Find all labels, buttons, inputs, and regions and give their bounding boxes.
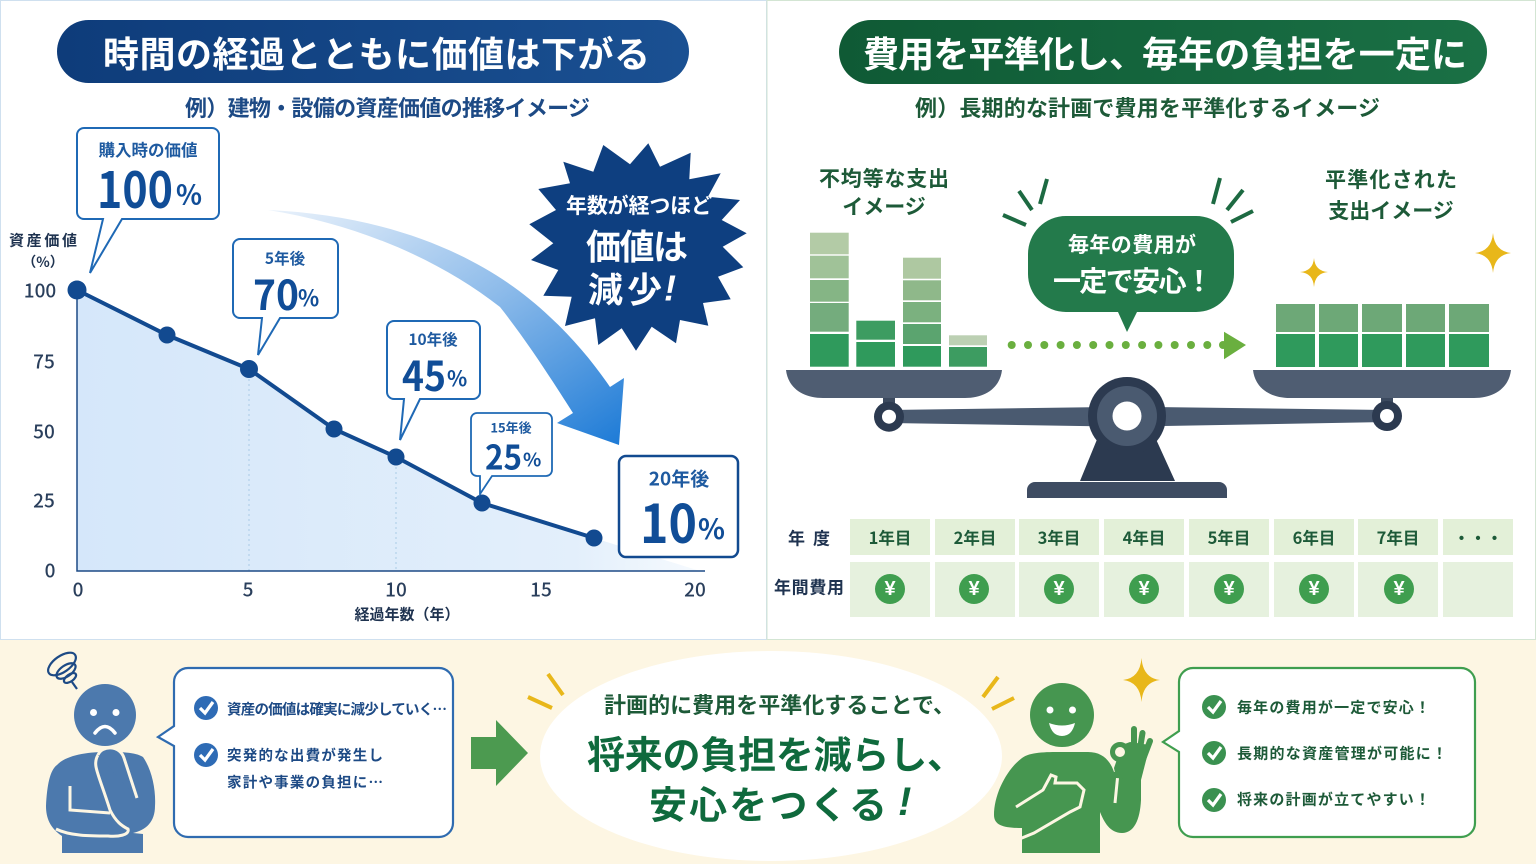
callout: 10 years 45%: % <box>447 363 467 393</box>
yen icons: ¥ <box>968 578 980 600</box>
callout: starburst value decreases: 減少 <box>588 262 662 314</box>
panel: bottom band <box>0 640 1536 864</box>
uneven stacked bars <box>810 233 987 367</box>
y axis labels: 0 <box>45 556 55 584</box>
level blocks <box>1276 304 1489 367</box>
callout: 10 years 45% <box>387 321 480 440</box>
emphasis ticks: yellow <box>528 674 1014 709</box>
callout: starburst value decreases <box>529 143 747 351</box>
icon: balance scale <box>786 370 1511 498</box>
row labels: 年度 <box>788 524 830 550</box>
yen icons: ¥ <box>1393 578 1405 600</box>
data line <box>68 280 602 546</box>
x axis labels: 経過年数（年） <box>354 604 460 624</box>
callout: 20 years 10%: 10 <box>640 483 697 559</box>
callout: 10 years 45%: 10年後 <box>408 328 458 350</box>
callout: purchase 100% <box>77 128 219 273</box>
callout: 15 years 25%: 25 <box>485 430 522 480</box>
callout: central message: ! <box>898 780 911 824</box>
year labels: 4年目 <box>1123 525 1165 549</box>
x axis labels <box>73 576 706 624</box>
yen icons: ¥ <box>1138 578 1150 600</box>
year labels: 3年目 <box>1038 525 1080 549</box>
callout: central message: 計画的に費用を平準化することで、 <box>604 688 955 720</box>
callout: central message: 将来の負担を減らし、 <box>587 724 965 780</box>
yen icons: ¥ <box>1053 578 1065 600</box>
callout: purchase 100%: % <box>176 174 202 212</box>
chart area fill <box>77 290 700 571</box>
icon: sparkles <box>1300 233 1511 287</box>
table: yearly costs <box>774 519 1513 617</box>
year labels: 6年目 <box>1293 525 1335 549</box>
y axis labels: 100 <box>24 276 56 304</box>
icon: dizzy swirl <box>44 648 80 689</box>
y axis labels: 50 <box>33 418 55 444</box>
y axis labels: 資産価値 <box>9 230 77 250</box>
heading: left title: 時間の経過とともに価値は下がる <box>103 26 650 78</box>
callout: central message: 安心をつくる <box>649 774 887 830</box>
panel: cost leveling <box>774 20 1513 617</box>
emphasis ticks <box>1003 178 1253 225</box>
callout: 15 years 25% <box>471 413 552 494</box>
callout: 20 years 10%: 20年後 <box>649 464 709 492</box>
year labels <box>869 525 1503 549</box>
year labels: 5年目 <box>1208 525 1250 549</box>
callout: starburst value decreases: 年数が経つほど <box>566 190 712 220</box>
x axis labels: 20 <box>684 576 706 602</box>
year labels: 2年目 <box>954 525 996 549</box>
callout: 15 years 25%: % <box>523 446 541 472</box>
check item: sudden expenses: 家計や事業の負担に… <box>227 772 383 792</box>
check item: easier planning: 将来の計画が立てやすい！ <box>1237 788 1430 810</box>
panel: asset value decline <box>9 20 747 624</box>
year labels: 1年目 <box>869 525 911 549</box>
icon: happy person <box>994 683 1150 853</box>
yen icons: ¥ <box>1223 578 1235 600</box>
callout: 20 years 10% <box>619 456 738 559</box>
callout: 5 years 70% <box>233 239 338 355</box>
label: uneven spending <box>819 163 949 221</box>
x axis labels: 15 <box>530 576 552 602</box>
check item: peace of mind: 毎年の費用が一定で安心！ <box>1237 696 1430 718</box>
callout: 5 years 70%: 5年後 <box>265 247 306 269</box>
yen icons <box>875 574 1414 604</box>
label: leveled spending <box>1325 164 1457 225</box>
x axis labels: 10 <box>385 576 407 602</box>
check item: sudden expenses: 突発的な出費が発生し <box>227 744 383 766</box>
y axis labels: （%） <box>22 252 64 272</box>
y axis labels: 25 <box>33 486 55 514</box>
row labels <box>774 524 844 598</box>
panel: left background <box>0 0 766 640</box>
speech panel: benefits <box>1163 668 1475 837</box>
speech bubble: peace of mind: 毎年の費用が <box>1068 229 1196 259</box>
label: uneven spending: イメージ <box>842 191 926 221</box>
callout: 20 years 10%: % <box>698 508 725 548</box>
callout: central message <box>540 651 1002 861</box>
label: leveled spending: 支出イメージ <box>1328 195 1454 225</box>
heading: right title: 費用を平準化し、 <box>863 26 1145 78</box>
subtitle: left: 例）建物・設備の資産価値の推移イメージ <box>185 91 590 123</box>
row labels: 年間費用 <box>774 574 844 598</box>
panel: right background <box>767 0 1536 640</box>
y axis labels: 75 <box>33 348 55 374</box>
label: uneven spending: 不均等な支出 <box>819 163 949 193</box>
check item: sudden expenses <box>194 743 383 792</box>
yen icons: ¥ <box>884 578 896 600</box>
callout: 15 years 25%: 15年後 <box>490 418 532 436</box>
subtitle: right: 例）長期的な計画で費用を平準化するイメージ <box>915 91 1380 123</box>
callout: 10 years 45%: 45 <box>402 343 446 403</box>
icon: OK hand <box>1112 729 1150 780</box>
callout: purchase 100%: 購入時の価値 <box>98 137 198 161</box>
check item: value decreases: 資産の価値は確実に減少していく… <box>227 698 447 720</box>
callout: purchase 100%: 100 <box>97 151 173 223</box>
speech bubble: peace of mind: 一定で安心！ <box>1053 260 1213 300</box>
callout: 5 years 70%: 70 <box>253 262 299 322</box>
callout: 5 years 70%: % <box>298 281 319 313</box>
x axis labels: 5 <box>243 576 253 602</box>
x axis labels: 0 <box>73 576 83 602</box>
callout: starburst value decreases: ! <box>664 268 676 308</box>
dotted arrow <box>1008 332 1246 359</box>
year cells <box>850 519 1513 555</box>
icon: gold sparkle <box>1123 658 1160 702</box>
year labels: ・・・ <box>1453 525 1503 549</box>
yen icons: ¥ <box>1308 578 1320 600</box>
icon: worried person <box>44 648 155 853</box>
panel: bottom summary <box>44 648 1475 861</box>
speech bubble: peace of mind <box>1028 216 1234 332</box>
callout: starburst value decreases: 価値は <box>586 220 688 270</box>
arrow: to solution <box>471 720 528 786</box>
speech panel: worries <box>158 668 453 837</box>
heading: right title <box>839 20 1487 84</box>
chart: asset value line chart <box>9 230 706 624</box>
cost cells <box>850 562 1513 617</box>
label: leveled spending: 平準化された <box>1325 164 1457 194</box>
heading: right title: 毎年の負担を一定に <box>1142 26 1467 78</box>
year labels: 7年目 <box>1377 525 1419 549</box>
arrow: downward curve <box>268 210 624 445</box>
check item: long-term management: 長期的な資産管理が可能に！ <box>1237 742 1447 764</box>
y axis labels <box>9 230 77 584</box>
